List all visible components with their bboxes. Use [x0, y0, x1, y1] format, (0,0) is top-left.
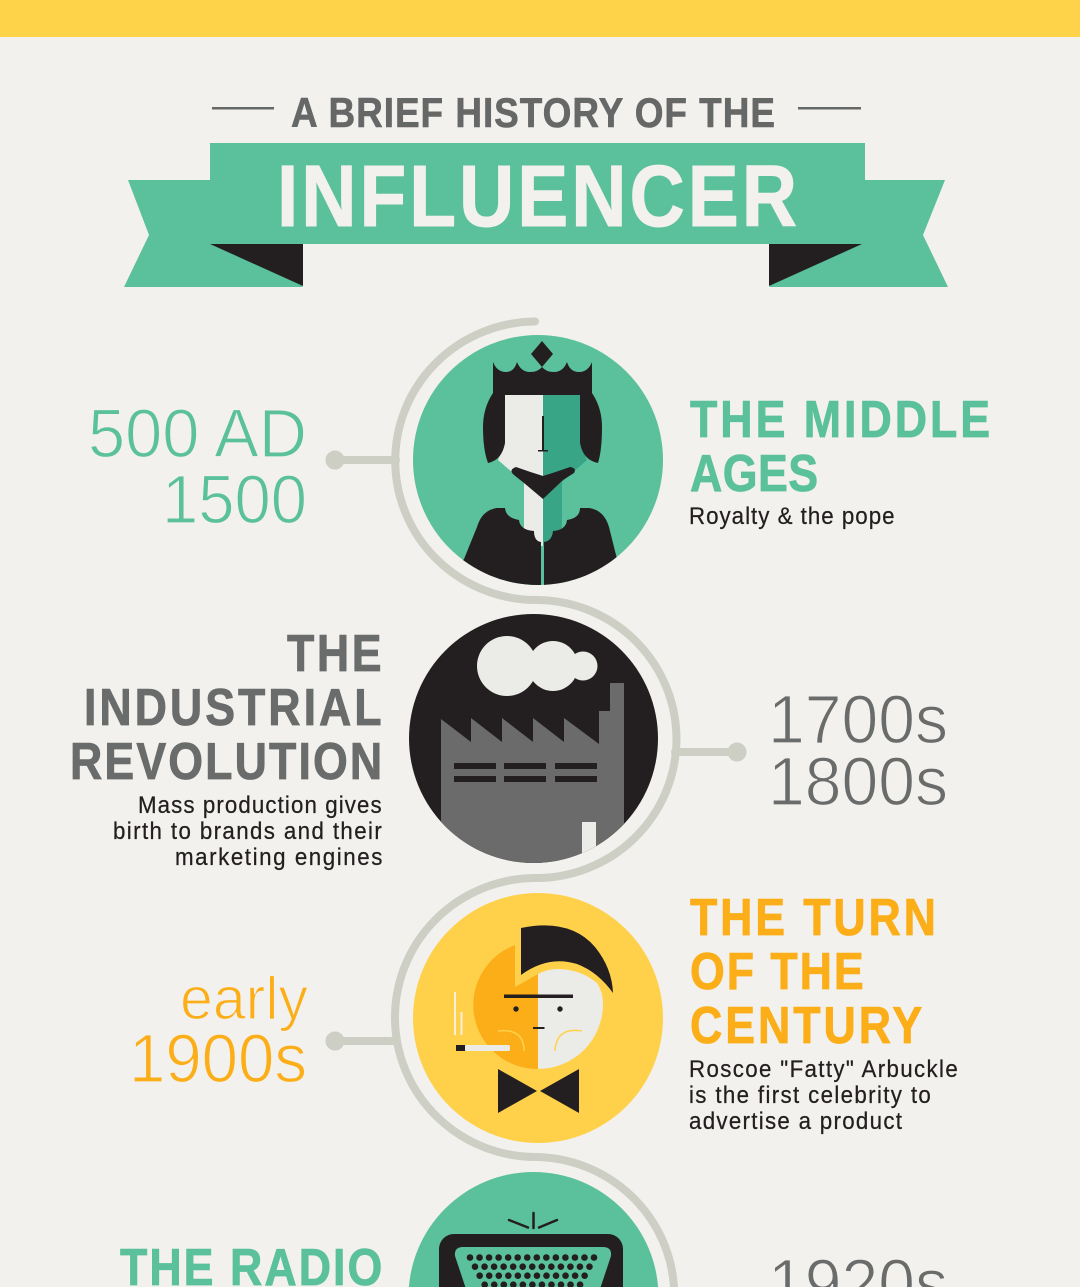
description: Roscoe "Fatty" Arbuckle	[689, 1055, 958, 1082]
description: birth to brands and their	[113, 817, 382, 844]
heading	[690, 889, 936, 1055]
description: Royalty & the pope	[689, 502, 895, 529]
icon: man with cigarette	[413, 893, 663, 1143]
icon: king	[413, 335, 663, 590]
years: 1700s 1800s: 1700s	[768, 681, 948, 758]
description: marketing engines	[175, 843, 382, 870]
years: 500 AD to 1500	[88, 395, 307, 538]
heading: INDUSTRIAL	[84, 679, 382, 737]
icon: factory	[409, 614, 658, 880]
description: advertise a product	[689, 1107, 903, 1134]
heading: OF THE	[690, 943, 864, 1001]
description	[113, 791, 382, 870]
heading: REVOLUTION	[70, 733, 382, 791]
description: Mass production gives	[138, 791, 382, 818]
timeline connector	[330, 322, 742, 1287]
description: is the first celebrity to	[689, 1081, 931, 1108]
years: 1700s 1800s: 1800s	[768, 743, 948, 820]
years: early 1900s	[129, 965, 308, 1097]
heading	[70, 625, 382, 791]
section: industrial revolution	[70, 614, 948, 880]
years: 1700s 1800s	[768, 681, 948, 820]
years: 500 AD to 1500: 500 AD	[88, 395, 307, 472]
ribbon banner	[124, 143, 948, 287]
years: early 1900s: 1900s	[129, 1020, 307, 1097]
section: turn of the century	[129, 889, 958, 1143]
section: middle ages	[88, 335, 990, 590]
years: 500 AD to 1500: 1500	[162, 461, 307, 538]
heading: THE TURN	[690, 889, 936, 947]
title main word: INFLUENCER	[277, 148, 797, 245]
heading: AGES	[690, 445, 818, 503]
heading	[690, 391, 990, 503]
heading: THE	[287, 625, 382, 683]
title group	[124, 90, 948, 287]
description	[689, 1055, 958, 1134]
top yellow band	[0, 0, 1080, 37]
section: the radio	[120, 1172, 948, 1287]
icon: radio	[408, 1172, 658, 1287]
heading: CENTURY	[690, 997, 922, 1055]
heading: THE MIDDLE	[690, 391, 990, 449]
title kicker: A BRIEF HISTORY OF THE	[291, 90, 775, 137]
years: early 1900s: early	[180, 965, 308, 1032]
